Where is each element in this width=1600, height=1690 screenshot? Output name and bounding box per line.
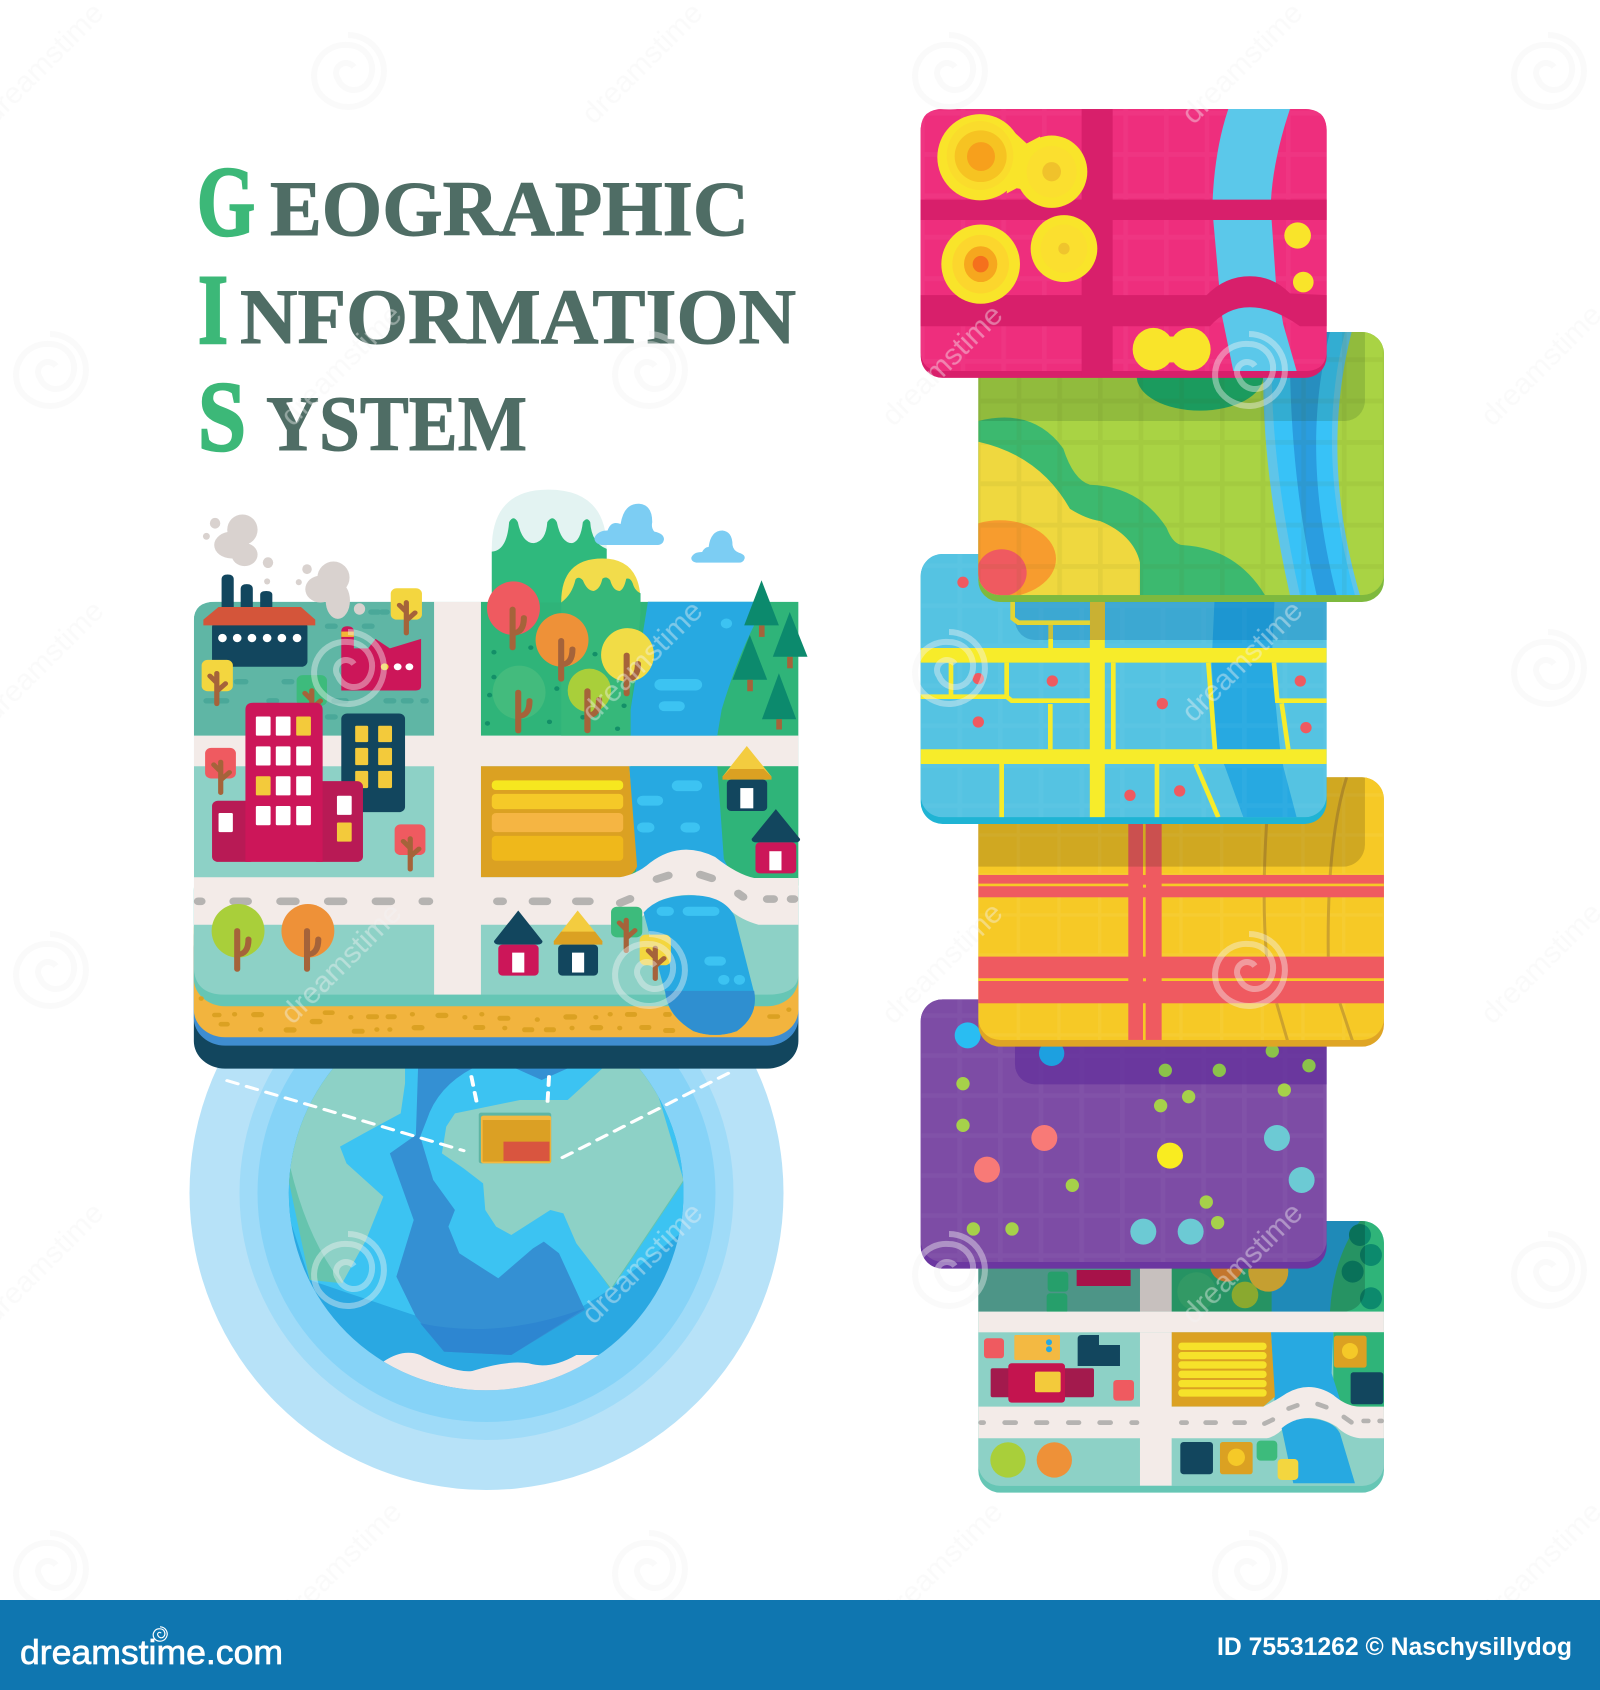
- dashed projection lines: [227, 1073, 728, 1159]
- roads: [921, 109, 1327, 376]
- building footprints: [984, 1335, 1383, 1480]
- island map: [194, 490, 808, 1069]
- forest trees: [487, 581, 654, 731]
- road dashes: [978, 1401, 1384, 1427]
- yellow point: [1157, 1143, 1183, 1169]
- heat blob: lower left: [941, 224, 1020, 304]
- card shadow: [1015, 1046, 1327, 1084]
- card shadow: [1015, 602, 1327, 640]
- watermark text: dreamstime: [1175, 0, 1309, 130]
- river: [1212, 602, 1296, 817]
- title: Geographic Information System: [197, 146, 796, 472]
- industrial ground dashes: [203, 609, 429, 720]
- footer bar: [0, 1600, 1600, 1690]
- smoke clouds: [203, 514, 365, 619]
- blue points: [955, 1022, 1064, 1066]
- green points: [956, 1044, 1316, 1236]
- street network: [921, 639, 1327, 817]
- clouds: [594, 504, 745, 563]
- card shadow: [978, 1221, 1365, 1312]
- title: Geographic Information System: EOGRAPHIC: [270, 165, 749, 252]
- red apartment building: [212, 703, 363, 862]
- title: Geographic Information System: S: [198, 361, 246, 472]
- road dashes: [194, 870, 798, 908]
- farm field stripes: [492, 780, 623, 861]
- forest floor dots: [485, 645, 627, 731]
- red square trees: [205, 748, 425, 869]
- houses: [494, 746, 800, 976]
- card shadow: [978, 332, 1365, 421]
- pine trees: [732, 580, 808, 730]
- watermark text: dreamstime: [1175, 1196, 1309, 1330]
- watermark text: dreamstime: [875, 1495, 1009, 1629]
- river top right: [631, 602, 767, 736]
- sand speckles: [199, 996, 791, 1034]
- layer card 6: base map: [978, 1221, 1384, 1493]
- river dashes: [637, 619, 732, 832]
- heat blob: top pair: [937, 114, 1087, 208]
- small map card on globe: [479, 1113, 551, 1163]
- factory with chimneys: [203, 575, 315, 667]
- small square trees: [202, 588, 422, 721]
- layer card 3: blue street network: [920, 554, 1327, 824]
- footer logo: dreamstime.com: [20, 1634, 283, 1672]
- layer card 4: yellow roads: [978, 777, 1384, 1047]
- watermark text: dreamstime: [274, 1495, 408, 1629]
- lakeside square trees: [611, 907, 671, 979]
- heat blob: lower middle: [1031, 215, 1097, 282]
- terrain contours: [978, 418, 1265, 596]
- title: Geographic Information System: I: [198, 254, 228, 365]
- card shadow: [978, 777, 1365, 867]
- island ground and blocks: [194, 602, 798, 996]
- river bands: [1263, 332, 1360, 595]
- watermark text: dreamstime: [575, 594, 709, 728]
- watermark text: dreamstime: [575, 0, 709, 130]
- small yellow points: [1133, 222, 1314, 371]
- field stripes: [1178, 1343, 1267, 1397]
- title: Geographic Information System: YSTEM: [266, 380, 527, 467]
- title: Geographic Information System: NFORMATION: [240, 273, 796, 360]
- island strata: [194, 863, 798, 1069]
- red point markers: [957, 577, 1312, 801]
- earth: [227, 1040, 728, 1393]
- red road network: [978, 824, 1384, 1040]
- footer credit: ID 75531262 © Naschysillydog: [1217, 1633, 1572, 1661]
- watermark text: dreamstime: [575, 1196, 709, 1330]
- layer card 2: green terrain: [978, 332, 1384, 602]
- cyan points: [1130, 1125, 1315, 1245]
- watermark text: dreamstime: [274, 298, 408, 432]
- watermark text: dreamstime: [875, 896, 1009, 1030]
- river: [1213, 109, 1297, 371]
- title: Geographic Information System: G: [197, 146, 255, 257]
- layer card 5: purple points: [920, 999, 1327, 1269]
- watermark text: dreamstime: [274, 896, 408, 1030]
- globe: [190, 1068, 784, 1490]
- red factory: [341, 626, 421, 690]
- watermark text: dreamstime: [1175, 594, 1309, 728]
- dark office building: [341, 713, 405, 812]
- salmon points: [974, 1125, 1057, 1183]
- layer card 1: pink heat map: [921, 109, 1327, 378]
- roadside round trees: [212, 904, 334, 969]
- lake: [644, 895, 755, 1035]
- mountains with snow: [492, 490, 641, 736]
- atmosphere rings: [190, 896, 784, 1490]
- watermark text: dreamstime: [875, 298, 1009, 432]
